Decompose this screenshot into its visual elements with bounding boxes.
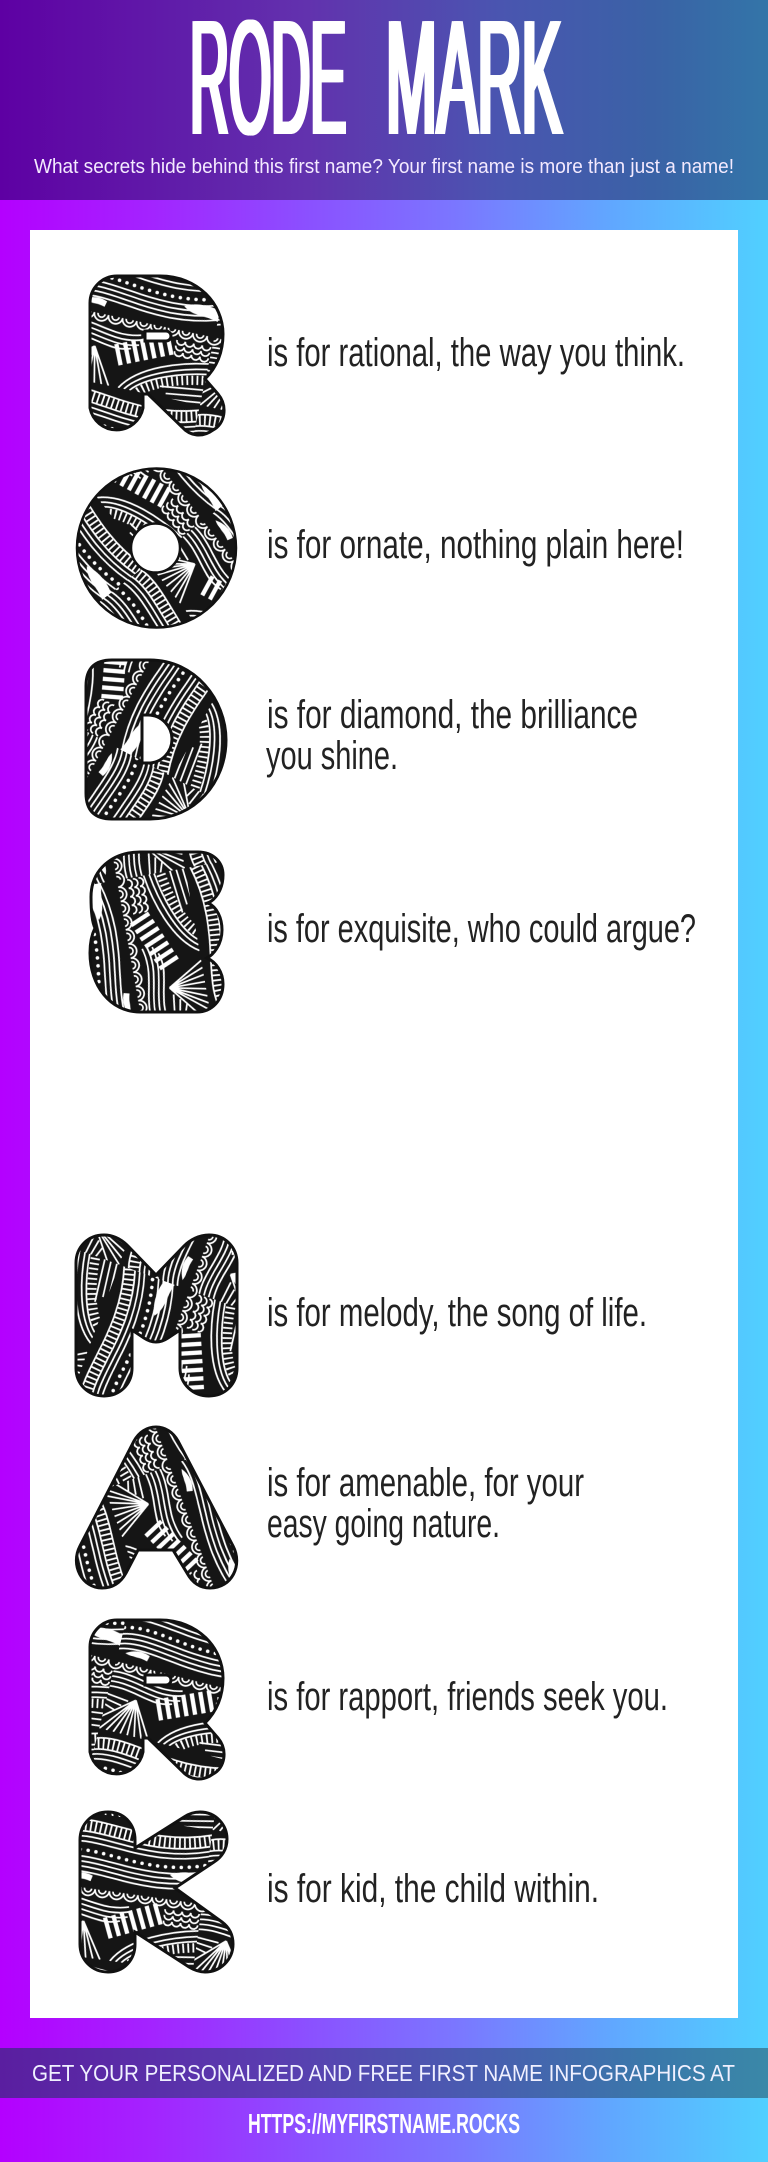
icon: patterned letter M bbox=[76, 1235, 237, 1396]
row: M melody bbox=[76, 1235, 647, 1396]
footer url: HTTPS://MYFIRSTNAME.ROCKS bbox=[248, 2108, 520, 2139]
row: D diamond: you shine. bbox=[266, 734, 398, 778]
subtitle: What secrets hide behind this first name? Your first name is more than just a name! bbox=[34, 156, 734, 178]
row: R rational bbox=[90, 276, 685, 435]
icon: patterned letter R bbox=[90, 276, 224, 435]
row: A amenable: easy going nature. bbox=[267, 1502, 500, 1546]
text: amenable: is for amenable, for your bbox=[267, 1461, 584, 1505]
icon: patterned letter E bbox=[90, 852, 223, 1012]
row: K kid bbox=[80, 1812, 599, 1972]
row: E exquisite bbox=[90, 852, 696, 1012]
icon: patterned letter D bbox=[86, 660, 226, 819]
footer band bbox=[0, 2048, 768, 2098]
header banner bbox=[0, 0, 768, 200]
row: O ornate bbox=[77, 468, 684, 628]
row: R rapport bbox=[90, 1620, 668, 1779]
icon: patterned letter O bbox=[77, 468, 236, 628]
row: A amenable bbox=[76, 1427, 584, 1588]
title bbox=[190, 0, 564, 169]
icon: patterned letter A bbox=[76, 1427, 237, 1588]
icon: patterned letter K bbox=[80, 1812, 233, 1972]
panel: letters bbox=[30, 230, 738, 2018]
row: D diamond bbox=[86, 660, 638, 819]
text: kid: is for kid, the child within. bbox=[267, 1867, 599, 1911]
icon: patterned letter R bbox=[90, 1620, 224, 1779]
